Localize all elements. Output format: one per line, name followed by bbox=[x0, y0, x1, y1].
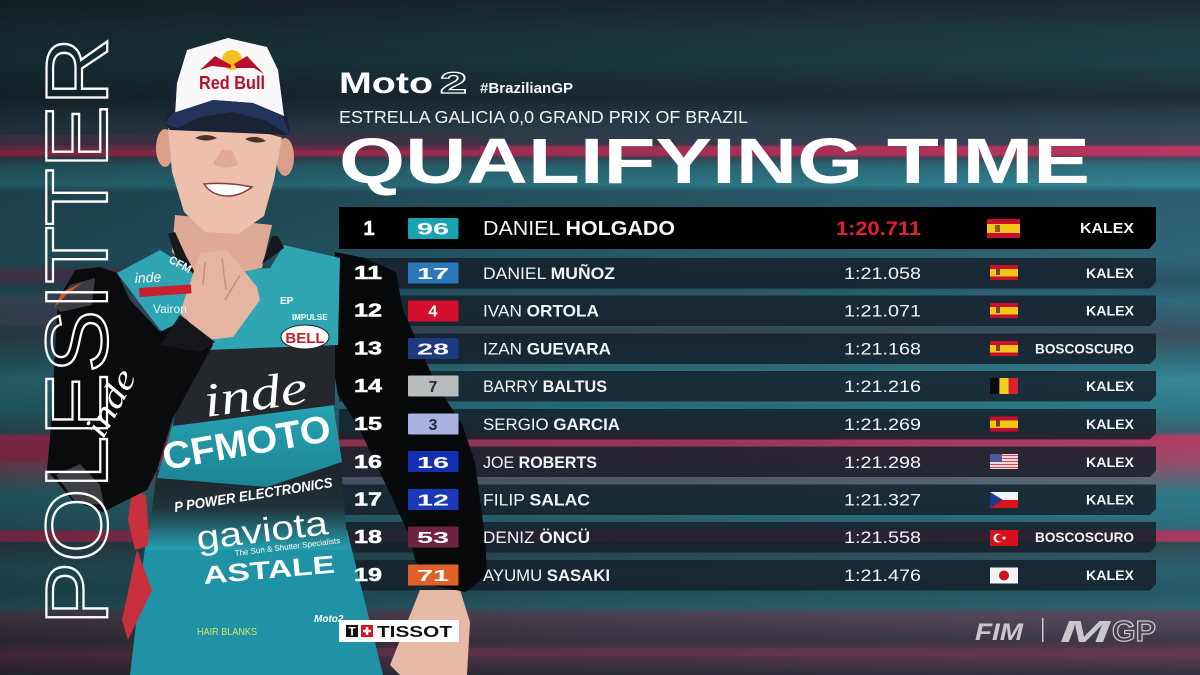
left arm sleeve bbox=[47, 267, 213, 512]
row: Baltus: KALEX bbox=[1086, 378, 1135, 394]
right hand bbox=[390, 590, 470, 675]
row: Öncü: 18 bbox=[354, 527, 382, 547]
hashtag: #BrazilianGP bbox=[480, 81, 573, 97]
polesitter rider photo illustration bbox=[47, 38, 487, 675]
ears bbox=[156, 129, 174, 167]
Tissot sponsor badge: TISSOT bbox=[377, 624, 452, 641]
fist bbox=[180, 250, 260, 340]
results row backgrounds bbox=[339, 207, 1156, 590]
row: Salac bbox=[354, 489, 1135, 510]
MotoGP logo bbox=[1042, 614, 1156, 649]
cap brim bbox=[165, 100, 290, 136]
suit logos: CFM bbox=[167, 254, 193, 276]
suit logos: gaviota bbox=[194, 504, 330, 558]
Bell badge: BELL bbox=[285, 330, 325, 347]
Moto2 logo: Moto bbox=[339, 67, 433, 100]
right arm sleeve bbox=[330, 252, 487, 592]
MotoGP logo: M bbox=[1060, 614, 1112, 649]
neck bbox=[172, 215, 272, 280]
row: Öncü: BOSCOSCURO bbox=[1035, 529, 1134, 545]
row: Ortola: 1:21.071 bbox=[844, 302, 921, 320]
row: pole position Holgado: KALEX bbox=[1080, 220, 1134, 237]
row: Roberts bbox=[354, 451, 1135, 472]
suit logos: ASTALE bbox=[202, 551, 336, 590]
row: Roberts: JOE ROBERTS bbox=[483, 453, 597, 472]
row: Muñoz: KALEX bbox=[1086, 265, 1135, 281]
eyes bbox=[195, 135, 266, 143]
row: Garcia: 1:21.269 bbox=[844, 415, 921, 434]
FIM logo: FIM bbox=[975, 619, 1024, 646]
row: Sasaki: 19 bbox=[354, 565, 382, 585]
row: Ortola: 12 bbox=[354, 300, 382, 320]
teal sponsor band bbox=[157, 403, 342, 487]
row: Roberts: 16 bbox=[417, 455, 449, 472]
heading: QUALIFYING TIME bbox=[339, 125, 1090, 197]
row: Baltus: 14 bbox=[354, 376, 382, 396]
row: Öncü: 1:21.558 bbox=[844, 528, 921, 547]
Tissot sponsor badge bbox=[339, 620, 459, 642]
row: Garcia: 3 bbox=[429, 417, 438, 434]
row: Salac: 12 bbox=[417, 492, 449, 510]
lower carbon panel bbox=[147, 455, 348, 550]
row: Muñoz bbox=[354, 262, 1135, 284]
row: Baltus: 7 bbox=[429, 379, 438, 396]
row: Roberts: 16 bbox=[354, 452, 382, 472]
event name: ESTRELLA GALICIA 0,0 GRAND PRIX OF BRAZIL bbox=[339, 107, 748, 127]
row: Guevara: 13 bbox=[354, 338, 382, 358]
row: Garcia: KALEX bbox=[1086, 416, 1135, 432]
suit logos: HAIR BLANKS bbox=[197, 627, 257, 638]
row: Ortola bbox=[354, 300, 1135, 322]
row: Salac: 1:21.327 bbox=[844, 490, 921, 510]
row: Sasaki: KALEX bbox=[1086, 567, 1135, 583]
smile bbox=[204, 183, 252, 196]
row: Garcia bbox=[354, 414, 1135, 434]
cap mesh bbox=[165, 60, 290, 135]
chest panel bbox=[117, 245, 340, 350]
row: pole position Holgado: 1:20.711 bbox=[836, 218, 921, 240]
suit logos: inde bbox=[134, 269, 162, 286]
row: Salac: KALEX bbox=[1086, 492, 1135, 508]
Bell badge bbox=[281, 325, 329, 349]
Moto2 logo bbox=[339, 67, 467, 100]
Moto2 logo: 2 bbox=[440, 67, 467, 100]
suit logos: EP bbox=[280, 296, 294, 307]
row: Öncü: 53 bbox=[417, 530, 449, 547]
row: Muñoz: DANIEL MUÑOZ bbox=[483, 263, 615, 283]
row: Öncü bbox=[354, 526, 1134, 548]
upper carbon panel bbox=[173, 335, 335, 426]
Tissot sponsor badge: T bbox=[348, 624, 356, 638]
suit logos: Moto2 bbox=[314, 614, 344, 625]
row: pole position Holgado: 1 bbox=[363, 218, 375, 240]
suit logos: inde bbox=[200, 361, 311, 428]
row: Garcia: SERGIO GARCIA bbox=[483, 415, 620, 434]
suit logos: IMPULSE bbox=[292, 313, 328, 322]
row: Baltus: 1:21.216 bbox=[844, 377, 921, 396]
row: Sasaki: 71 bbox=[417, 568, 449, 585]
red leg panels bbox=[122, 490, 152, 640]
row: Roberts: 1:21.298 bbox=[844, 453, 921, 472]
row: Sasaki: 1:21.476 bbox=[844, 566, 921, 585]
cap Red Bull logo bbox=[199, 50, 265, 93]
row: pole position Holgado: DANIEL HOLGADO bbox=[483, 218, 675, 240]
collar bbox=[168, 232, 284, 278]
row: Ortola: 4 bbox=[429, 304, 438, 320]
shoulder slider bbox=[55, 278, 95, 312]
suit logos bbox=[77, 254, 344, 638]
suit logos: The Sun & Shutter Specialists bbox=[234, 536, 341, 558]
suit logos: CFMOTO bbox=[159, 408, 334, 479]
row: Guevara: BOSCOSCURO bbox=[1035, 340, 1134, 356]
suit logos: inde bbox=[77, 363, 144, 444]
title block bbox=[339, 67, 1090, 197]
glove cuff bbox=[160, 315, 215, 352]
suit logos: P POWER ELECTRONICS bbox=[173, 474, 334, 515]
row: Ortola: IVAN ORTOLA bbox=[483, 302, 599, 320]
row: Baltus: BARRY BALTUS bbox=[483, 377, 607, 396]
row: Muñoz: 11 bbox=[354, 263, 382, 283]
row: Sasaki bbox=[354, 564, 1135, 586]
row: Muñoz: 17 bbox=[417, 266, 449, 283]
vertical heading: POLESITTER: POLESITTER bbox=[27, 37, 126, 625]
row: Guevara: 1:21.168 bbox=[844, 340, 921, 358]
row: Roberts: KALEX bbox=[1086, 454, 1135, 470]
cap Red Bull logo: Red Bull bbox=[199, 72, 265, 93]
row: Salac: FILIP SALAC bbox=[483, 490, 590, 510]
lower suit bbox=[130, 530, 383, 675]
MotoGP logo: GP bbox=[1112, 616, 1156, 648]
row: Guevara: 28 bbox=[417, 342, 449, 358]
cap crown bbox=[175, 38, 284, 116]
row: Guevara: IZAN GUEVARA bbox=[483, 340, 611, 358]
row: Öncü: DENIZ ÖNCÜ bbox=[483, 528, 590, 547]
row: Ortola: KALEX bbox=[1086, 302, 1135, 318]
row: Baltus bbox=[354, 376, 1135, 396]
row: Garcia: 15 bbox=[354, 414, 382, 434]
nose bbox=[213, 150, 238, 168]
row: Guevara bbox=[354, 338, 1134, 359]
hair shadow under brim bbox=[170, 113, 283, 138]
face bbox=[168, 120, 282, 234]
row: pole position Holgado: 96 bbox=[417, 220, 449, 238]
row: Salac: 17 bbox=[354, 490, 382, 510]
row: Sasaki: AYUMU SASAKI bbox=[483, 566, 610, 585]
suit logos: Vairon bbox=[153, 302, 187, 316]
elbow slider bbox=[56, 464, 104, 505]
row: pole position Holgado bbox=[363, 218, 1134, 240]
row: Muñoz: 1:21.058 bbox=[844, 264, 921, 283]
